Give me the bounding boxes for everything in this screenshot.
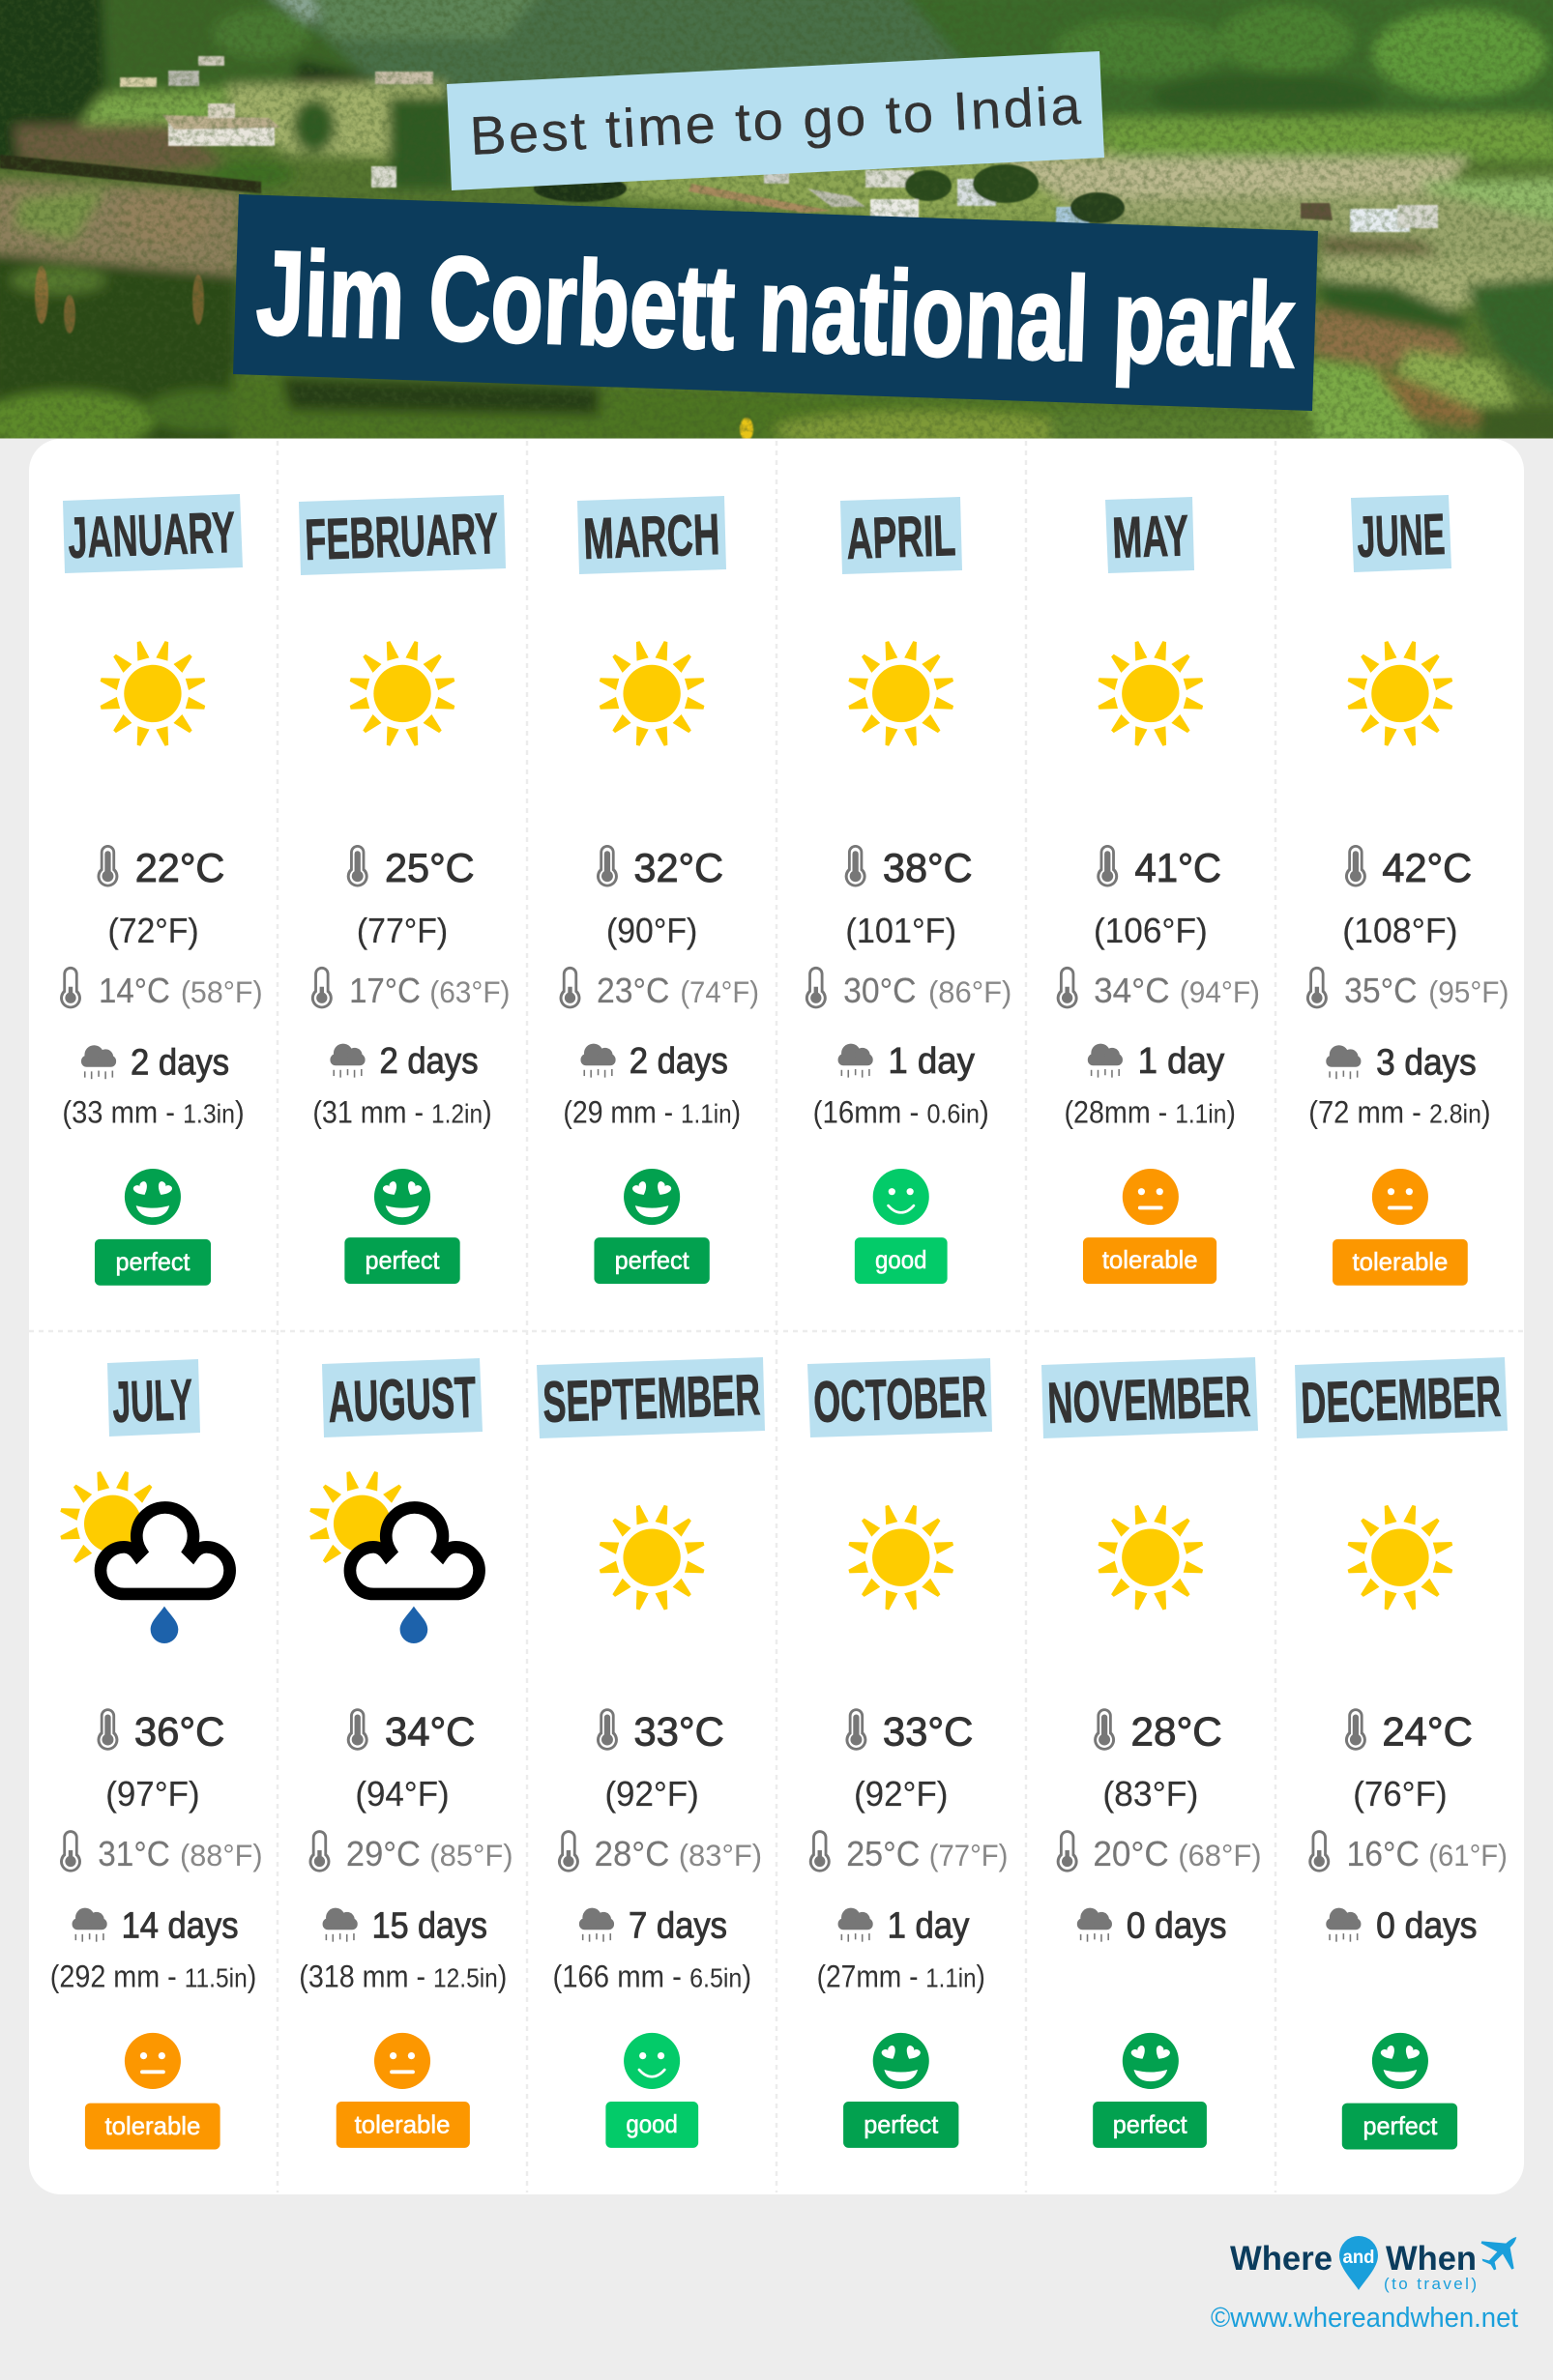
high temperature xyxy=(845,1708,973,1814)
rating: perfect xyxy=(843,2033,958,2148)
month heading: February: FEBRUARY xyxy=(304,501,499,572)
lower left foliage xyxy=(0,253,237,445)
month heading: March: MARCH xyxy=(582,502,720,571)
rainfall: 0 days xyxy=(1127,1904,1226,1945)
high temperature xyxy=(97,1708,224,1814)
low temperature: (74°F) xyxy=(680,975,759,1009)
rainfall: 1 day xyxy=(1138,1040,1224,1081)
rating: tolerable: tolerable xyxy=(1352,1249,1448,1276)
high temperature: (77°F) xyxy=(357,911,448,950)
high temperature: (108°F) xyxy=(1342,911,1458,950)
low temperature: 34°C xyxy=(1094,971,1170,1010)
icon: sun, cloud and rain drop xyxy=(59,1470,230,1643)
icon: sun xyxy=(847,640,954,747)
low temperature: (85°F) xyxy=(429,1839,513,1872)
high temperature: 36°C xyxy=(134,1708,224,1754)
low temperature: (68°F) xyxy=(1178,1839,1262,1872)
bottom foliage xyxy=(226,371,1166,439)
website credit: ©www.whereandwhen.net xyxy=(1211,2303,1518,2334)
month heading: October xyxy=(807,1358,992,1437)
rainfall: 15 days xyxy=(372,1904,487,1945)
high temperature xyxy=(1094,845,1221,950)
low temperature: (58°F) xyxy=(181,975,263,1009)
low temperature: 29°C xyxy=(346,1834,421,1873)
rainfall: (72 mm - 2.8in) xyxy=(1308,1095,1491,1130)
month heading: October: OCTOBER xyxy=(812,1364,987,1435)
rating: perfect xyxy=(1093,2033,1207,2148)
rainfall: (16mm - 0.6in) xyxy=(813,1095,989,1130)
high temperature: 24°C xyxy=(1382,1708,1473,1754)
month heading: August: AUGUST xyxy=(327,1365,477,1435)
rainfall: 7 days xyxy=(629,1904,727,1945)
low temperature xyxy=(1057,1830,1262,1873)
logo: Where and When: (to travel) xyxy=(1384,2275,1477,2293)
rating: perfect: perfect xyxy=(115,1249,190,1276)
subtitle text: Best time to go to India xyxy=(468,74,1083,166)
rating: perfect: perfect xyxy=(864,2111,938,2138)
icon: sun xyxy=(1097,1504,1204,1611)
rainfall xyxy=(50,1904,256,1994)
rainfall: (28mm - 1.1in) xyxy=(1064,1095,1236,1130)
high temperature: (76°F) xyxy=(1353,1774,1448,1814)
rainfall: (318 mm - 12.5in) xyxy=(299,1959,507,1994)
rating: tolerable xyxy=(1083,1169,1216,1284)
panel: March xyxy=(560,496,759,1284)
high temperature: 33°C xyxy=(883,1708,973,1754)
panel: November xyxy=(1041,1357,1262,2148)
rainfall: 2 days xyxy=(379,1040,479,1081)
low temperature: 30°C xyxy=(843,971,916,1010)
month heading: April: APRIL xyxy=(845,503,956,571)
rainfall: (29 mm - 1.1in) xyxy=(563,1095,741,1130)
low temperature xyxy=(60,967,263,1010)
rating: tolerable xyxy=(337,2033,470,2148)
rainfall: 14 days xyxy=(122,1904,238,1945)
rainfall xyxy=(299,1904,507,1994)
high temperature: 28°C xyxy=(1131,1708,1222,1754)
low temperature xyxy=(60,1830,263,1873)
rainfall: 1 day xyxy=(888,1040,975,1081)
rainfall: (292 mm - 11.5in) xyxy=(50,1959,256,1994)
high temperature: (106°F) xyxy=(1094,911,1208,950)
icon: plane xyxy=(1481,2237,1516,2270)
low temperature: (77°F) xyxy=(929,1839,1008,1872)
low temperature: 25°C xyxy=(846,1834,920,1873)
icon: map pin xyxy=(1339,2236,1378,2290)
panel: April xyxy=(806,497,1011,1284)
rainfall xyxy=(813,1040,989,1130)
icon: sun, cloud and rain drop xyxy=(308,1470,480,1643)
icon: sun xyxy=(1346,640,1453,747)
rating: perfect xyxy=(1342,2033,1457,2149)
panel: October xyxy=(807,1358,1008,2148)
high temperature: (94°F) xyxy=(355,1774,450,1814)
low temperature: 28°C xyxy=(595,1834,669,1873)
panel: July xyxy=(50,1359,263,2149)
rainfall xyxy=(1326,1904,1478,1945)
low temperature: 14°C xyxy=(99,971,170,1010)
high temperature: 25°C xyxy=(385,845,475,890)
rating: perfect: perfect xyxy=(366,1247,439,1274)
month heading: July: JULY xyxy=(111,1367,193,1435)
icon: sun xyxy=(599,1504,706,1611)
subtitle banner xyxy=(447,51,1104,190)
high temperature xyxy=(347,1708,475,1814)
icon: sun xyxy=(99,640,206,747)
rating: tolerable: tolerable xyxy=(104,2113,200,2140)
panel: May xyxy=(1057,497,1260,1284)
rating: good xyxy=(855,1169,948,1284)
high temperature xyxy=(347,845,475,950)
rainfall: (27mm - 1.1in) xyxy=(817,1959,985,1994)
rating: perfect: perfect xyxy=(1113,2111,1187,2138)
low temperature xyxy=(1057,967,1260,1010)
main white building xyxy=(168,123,275,146)
rainfall xyxy=(312,1040,492,1130)
rating: perfect xyxy=(344,1169,460,1284)
low temperature: (94°F) xyxy=(1180,975,1260,1009)
high temperature xyxy=(1094,1708,1222,1814)
rainfall: 3 days xyxy=(1376,1041,1477,1082)
month heading: June: JUNE xyxy=(1356,502,1446,569)
rainfall: 2 days xyxy=(630,1040,728,1081)
panel: December xyxy=(1295,1357,1508,2149)
month heading: August xyxy=(322,1358,483,1437)
low temperature: 31°C xyxy=(98,1834,170,1873)
high temperature: (101°F) xyxy=(845,911,956,950)
rainfall xyxy=(1077,1904,1226,1945)
rating: good xyxy=(605,2033,698,2148)
month heading: May: MAY xyxy=(1111,503,1189,570)
low temperature: (88°F) xyxy=(180,1839,263,1872)
rainfall: (31 mm - 1.2in) xyxy=(312,1095,492,1130)
rainfall: 1 day xyxy=(888,1904,970,1945)
distant hill xyxy=(311,0,963,104)
low temperature: (83°F) xyxy=(679,1839,762,1872)
high temperature: 38°C xyxy=(883,845,973,890)
icon: sun xyxy=(1346,1504,1453,1611)
low temperature xyxy=(806,967,1011,1010)
low temperature xyxy=(1306,967,1509,1010)
rating: tolerable xyxy=(1333,1169,1468,1286)
month heading: March xyxy=(577,496,726,574)
right hill xyxy=(907,0,1553,126)
rainfall xyxy=(1308,1041,1491,1130)
low temperature: (63°F) xyxy=(429,975,510,1009)
low temperature: 17°C xyxy=(349,971,421,1010)
title banner xyxy=(233,194,1318,411)
low temperature xyxy=(809,1830,1008,1873)
high temperature: 41°C xyxy=(1135,845,1221,890)
icon: sun xyxy=(349,640,455,747)
high temperature: 32°C xyxy=(633,845,723,890)
rating: good: good xyxy=(626,2111,678,2138)
high temperature: 33°C xyxy=(633,1708,724,1754)
low temperature: 16°C xyxy=(1347,1834,1420,1873)
header photo: valley landscape xyxy=(0,0,1553,450)
month heading: May xyxy=(1105,497,1194,573)
high temperature: 42°C xyxy=(1382,845,1472,890)
high temperature: (92°F) xyxy=(854,1774,948,1814)
icon: sun xyxy=(847,1504,954,1611)
icon: sun xyxy=(1097,640,1204,747)
month heading: September: SEPTEMBER xyxy=(542,1362,761,1435)
high temperature: (72°F) xyxy=(107,911,199,950)
low temperature xyxy=(558,1830,762,1873)
low temperature: 23°C xyxy=(597,971,669,1010)
month heading: February xyxy=(299,495,506,575)
high temperature xyxy=(845,845,973,950)
panel: February xyxy=(299,495,510,1284)
low temperature xyxy=(311,967,510,1010)
rating: tolerable: tolerable xyxy=(355,2112,450,2139)
month heading: June xyxy=(1351,495,1451,572)
high temperature xyxy=(97,845,224,950)
rating: perfect xyxy=(594,1169,710,1284)
slope and field xyxy=(77,89,232,131)
rating: perfect: perfect xyxy=(1363,2113,1437,2140)
terraces xyxy=(0,179,242,276)
rainfall xyxy=(563,1040,741,1130)
logo: Where and When: When xyxy=(1386,2240,1477,2278)
logo: Where and When: and xyxy=(1342,2248,1375,2268)
month heading: September xyxy=(537,1357,765,1438)
low temperature: 35°C xyxy=(1344,971,1418,1010)
month heading: November: NOVEMBER xyxy=(1046,1364,1251,1436)
logo: Where and When xyxy=(1230,2236,1516,2293)
rainfall xyxy=(1064,1040,1236,1130)
high temperature: (83°F) xyxy=(1102,1774,1198,1814)
low temperature xyxy=(308,1830,513,1873)
rainfall xyxy=(552,1904,751,1994)
low temperature xyxy=(1308,1830,1508,1873)
panel: June xyxy=(1306,495,1509,1286)
rainfall: 0 days xyxy=(1376,1904,1478,1945)
rainfall: (166 mm - 6.5in) xyxy=(552,1959,751,1994)
rating: good: good xyxy=(875,1247,926,1274)
high temperature xyxy=(597,1708,724,1814)
panel: September xyxy=(537,1357,765,2148)
panel: August xyxy=(299,1358,513,2148)
panel: January xyxy=(60,494,263,1286)
low temperature xyxy=(560,967,759,1010)
high temperature: (97°F) xyxy=(105,1774,200,1814)
left trees xyxy=(0,0,106,164)
icon: sun xyxy=(599,640,706,747)
low temperature: 20°C xyxy=(1093,1834,1169,1873)
high temperature xyxy=(597,845,723,950)
month heading: January xyxy=(63,494,243,573)
rating: perfect xyxy=(95,1169,211,1286)
month heading: April xyxy=(840,497,962,574)
month heading: January: JANUARY xyxy=(67,500,236,570)
rating: tolerable: tolerable xyxy=(1102,1247,1198,1274)
high temperature xyxy=(1342,845,1472,950)
month heading: November xyxy=(1041,1357,1258,1438)
middle: fields, village xyxy=(619,145,1112,224)
panel: months card xyxy=(29,439,1524,2194)
high temperature xyxy=(1345,1708,1473,1814)
low temperature: (86°F) xyxy=(928,975,1011,1009)
rainfall: (33 mm - 1.3in) xyxy=(62,1095,245,1130)
high temperature: 22°C xyxy=(135,845,224,890)
month heading: July xyxy=(107,1359,200,1437)
rainfall xyxy=(62,1041,245,1130)
rating: perfect: perfect xyxy=(615,1247,689,1274)
low temperature: (61°F) xyxy=(1428,1839,1508,1872)
rating: tolerable xyxy=(85,2033,220,2149)
high temperature: (90°F) xyxy=(606,911,697,950)
logo: Where and When: Where xyxy=(1230,2240,1333,2278)
rainfall xyxy=(817,1904,985,1994)
rainfall: 2 days xyxy=(131,1041,229,1082)
low temperature: (95°F) xyxy=(1428,975,1509,1009)
high temperature: (92°F) xyxy=(604,1774,699,1814)
high temperature: 34°C xyxy=(385,1708,475,1754)
